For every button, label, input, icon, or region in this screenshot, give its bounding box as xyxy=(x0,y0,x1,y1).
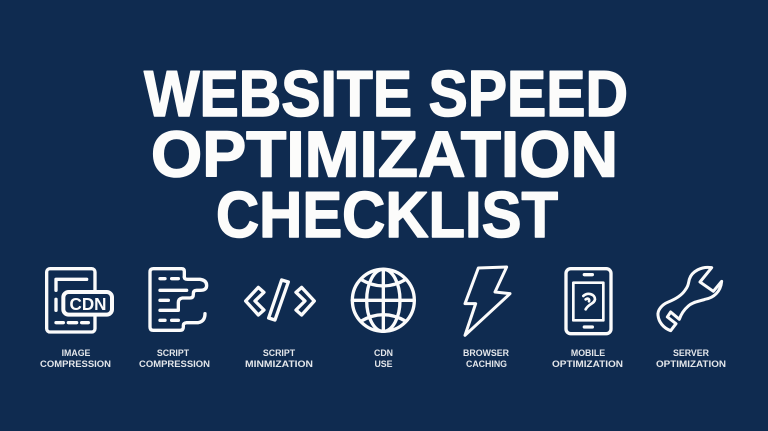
label: mobile optimization: MOBILE xyxy=(571,348,605,358)
title xyxy=(144,57,628,251)
label: script minification xyxy=(245,348,313,369)
icon: script minification xyxy=(246,280,314,320)
icon: script compression xyxy=(150,269,207,330)
icon: wrench xyxy=(658,267,722,331)
title: OPTIMIZATION xyxy=(151,118,618,190)
label: CDN use: USE xyxy=(374,359,393,369)
title: CHECKLIST xyxy=(216,178,558,251)
label: script minification: SCRIPT xyxy=(263,348,296,358)
label: server optimization: OPTIMIZATION xyxy=(656,359,726,369)
label: browser caching: CACHING xyxy=(466,359,507,369)
title: WEBSITE SPEED xyxy=(144,57,628,130)
label: image compression: IMAGE xyxy=(62,348,91,358)
label: script compression: COMPRESSION xyxy=(139,359,210,369)
icon: mobile phone xyxy=(566,269,611,334)
label: script minification: MINMIZATION xyxy=(245,359,313,369)
label: mobile optimization xyxy=(552,348,623,369)
icon: image compression: CDN xyxy=(70,294,106,314)
icon: globe xyxy=(352,269,414,331)
icon: lightning bolt xyxy=(465,267,510,335)
label: CDN use: CDN xyxy=(374,348,393,358)
label: CDN use xyxy=(374,348,393,369)
label: browser caching: BROWSER xyxy=(463,348,510,358)
label: image compression: COMPRESSION xyxy=(40,359,111,369)
label: script compression: SCRIPT xyxy=(157,348,190,358)
label: browser caching xyxy=(463,348,510,369)
label: script compression xyxy=(139,348,210,369)
label: mobile optimization: OPTIMIZATION xyxy=(552,359,623,369)
label: image compression xyxy=(40,348,111,369)
icon: image compression xyxy=(47,269,112,332)
label: server optimization xyxy=(656,348,726,369)
label: server optimization: SERVER xyxy=(673,348,710,358)
